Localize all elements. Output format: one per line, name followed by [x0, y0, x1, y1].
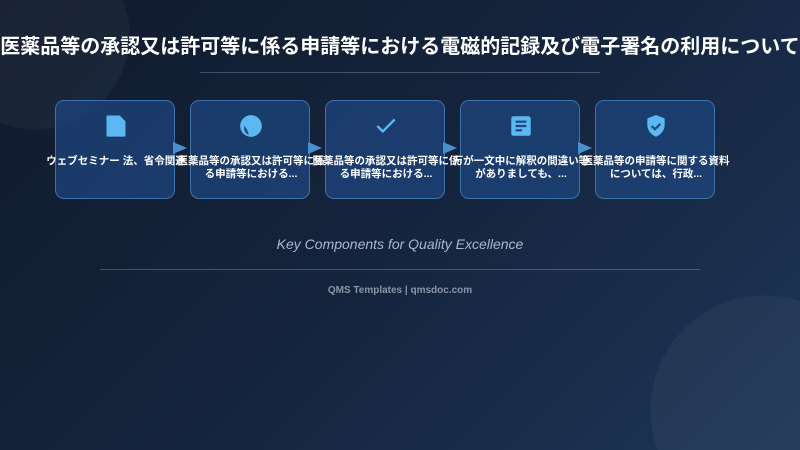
panel: step 1: [55, 100, 175, 199]
icon: check: [376, 118, 396, 133]
icon: document: [106, 116, 126, 137]
panel: step 3: [325, 100, 445, 199]
panel: step 3: 医薬品等の承認又は許可等に係: [312, 155, 460, 167]
panel: step 4: [460, 100, 580, 199]
arrow: [578, 142, 592, 154]
panel: step 4: 万が一文中に解釈の間違い等: [453, 155, 589, 167]
arrow: [443, 142, 457, 154]
panel: step 4: がありましても、...: [475, 168, 567, 180]
title: 医薬品等の承認又は許可等に係る申請等における電磁的記録及び電子署名の利用について: [0, 36, 800, 58]
panel: step 5: については、行政...: [610, 168, 702, 180]
panel: step 2: [190, 100, 310, 199]
icon: globe: [240, 115, 262, 137]
panel: step 2: る申請等における...: [205, 168, 297, 180]
panel: step 2: 医薬品等の承認又は許可等に係: [178, 155, 324, 167]
subtitle: Key Components for Quality Excellence: [277, 236, 523, 252]
panel: step 5: 医薬品等の申請等に関する資料: [582, 155, 730, 167]
panel: step 5: [595, 100, 715, 199]
panel: step 3: る申請等における...: [340, 168, 432, 180]
footer: QMS Templates | qmsdoc.com: [328, 285, 472, 296]
icon: list: [511, 116, 531, 136]
arrow: [308, 142, 322, 154]
arrow: [173, 142, 187, 154]
panel: step 1: ウェブセミナー 法、省令関連: [46, 155, 186, 167]
icon: shield: [647, 115, 665, 137]
